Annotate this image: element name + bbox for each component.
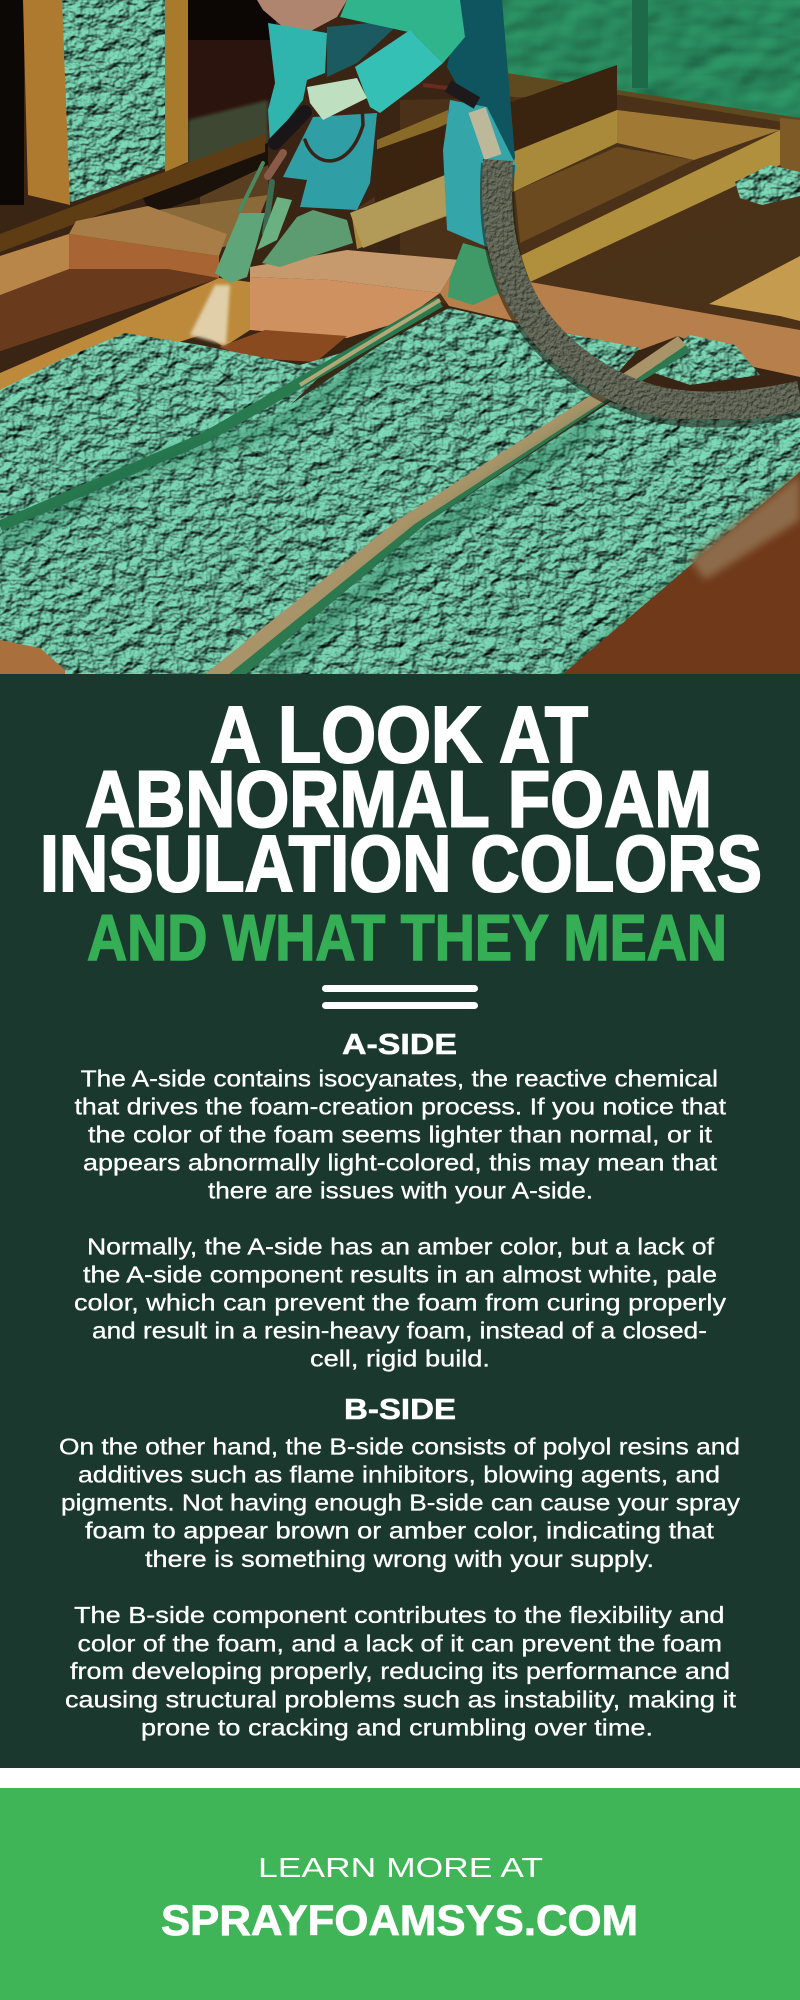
dark back room [0, 0, 276, 253]
text block: A-side paragraph 1: there are issues with your A-side. [208, 1178, 593, 1204]
left shoe [262, 210, 353, 267]
text block: B-side paragraph 2 [65, 1602, 737, 1741]
text block: B-side paragraph 2: prone to cracking and crumbling over time. [141, 1715, 653, 1741]
text block: B-side paragraph 1: additives such as flame inhibitors, blowing agents, and [78, 1462, 720, 1488]
back and torso [447, 0, 515, 180]
floor bays behind the worker [350, 65, 800, 330]
worker [215, 0, 517, 305]
joist between left and middle bays [0, 300, 440, 526]
hoses to spray gun [240, 103, 363, 233]
upper sleeve [340, 0, 465, 63]
text block: A-side paragraph 2: and result in a resin-heavy foam, instead of a closed- [92, 1318, 707, 1344]
text block: A-side paragraph 1: the color of the foam seems lighter than normal, or it [88, 1122, 713, 1148]
left bay wood framing [0, 206, 250, 400]
double rule divider [322, 985, 478, 1009]
heading: B-side: B-SIDE [344, 1394, 456, 1426]
right leg [443, 100, 517, 247]
photo: worker spraying green foam insulation between floor joists [0, 0, 800, 675]
title: ABNORMAL FOAM [85, 754, 712, 844]
text block: B-side paragraph 2: The B-side component contributes to the flexibility and [74, 1602, 724, 1628]
left arm [268, 23, 327, 143]
foam middle bay [0, 308, 640, 675]
text block: A-side paragraph 1: that drives the foam-creation process. If you notice that [74, 1094, 727, 1120]
foam right bay [245, 402, 800, 675]
text block: B-side paragraph 2: from developing properly, reducing its performance and [70, 1658, 730, 1684]
hose [423, 85, 800, 411]
back wall with green foam [500, 0, 800, 140]
insulation chunk on the right [735, 165, 800, 205]
right floor joists [350, 110, 800, 321]
text block: A-side paragraph 2: Normally, the A-side has an amber color, but a lack of [87, 1234, 715, 1260]
text block: A-side paragraph 2: color, which can prevent the foam from curing properly [74, 1290, 726, 1316]
wood corner lower left [0, 640, 65, 675]
text block: B-side paragraph 2: causing structural problems such as instability, making it [65, 1686, 737, 1712]
left leg [283, 113, 377, 210]
worker head [257, 0, 347, 33]
centre wood block [219, 250, 460, 362]
soft foam shadow along joists [0, 355, 800, 675]
right shoe [448, 243, 500, 305]
spray gun [215, 213, 265, 283]
website address: SPRAYFOAMSYS.COM [161, 1897, 638, 1945]
top of joist lower right [440, 260, 800, 377]
foam left bay [0, 333, 345, 538]
text block: A-side paragraph 2: the A-side component results in an almost white, pale [83, 1262, 717, 1288]
text block: B-side paragraph 1: foam to appear brown or amber color, indicating that [85, 1518, 715, 1544]
text block: A-side paragraph 1: The A-side contains isocyanates, the reactive chemical [81, 1066, 718, 1092]
panel: dark green article background [0, 674, 800, 1768]
call to action label: LEARN MORE AT [258, 1852, 543, 1883]
text block: A-side paragraph 1 [74, 1066, 727, 1204]
text block: A-side paragraph 2: cell, rigid build. [310, 1346, 490, 1372]
joist between middle and right bays [204, 336, 686, 675]
text block: B-side paragraph 1 [59, 1434, 740, 1572]
wood floor lower right [562, 472, 800, 675]
text block: A-side paragraph 2 [74, 1234, 726, 1372]
title [40, 690, 762, 908]
text block: B-side paragraph 1: pigments. Not having enough B-side can cause your spray [61, 1490, 740, 1516]
left wall stud and foam panel [0, 0, 265, 252]
heading: A-side: A-SIDE [342, 1029, 457, 1061]
text block: B-side paragraph 1: there is something wrong with your supply. [145, 1546, 654, 1572]
text block: B-side paragraph 2: color of the foam, and a lack of it can prevent the foam [78, 1630, 722, 1656]
text block: B-side paragraph 1: On the other hand, the B-side consists of polyol resins and [59, 1434, 740, 1460]
title: A LOOK AT [210, 690, 588, 779]
panel: call to action [0, 1788, 800, 2000]
right arm sleeve [355, 30, 443, 113]
text block: A-side paragraph 1: appears abnormally light-colored, this may mean that [83, 1150, 718, 1176]
spray gun boot [257, 197, 292, 250]
spray mist [190, 285, 230, 345]
glove [307, 78, 367, 120]
foam patch past the hose [640, 335, 760, 385]
